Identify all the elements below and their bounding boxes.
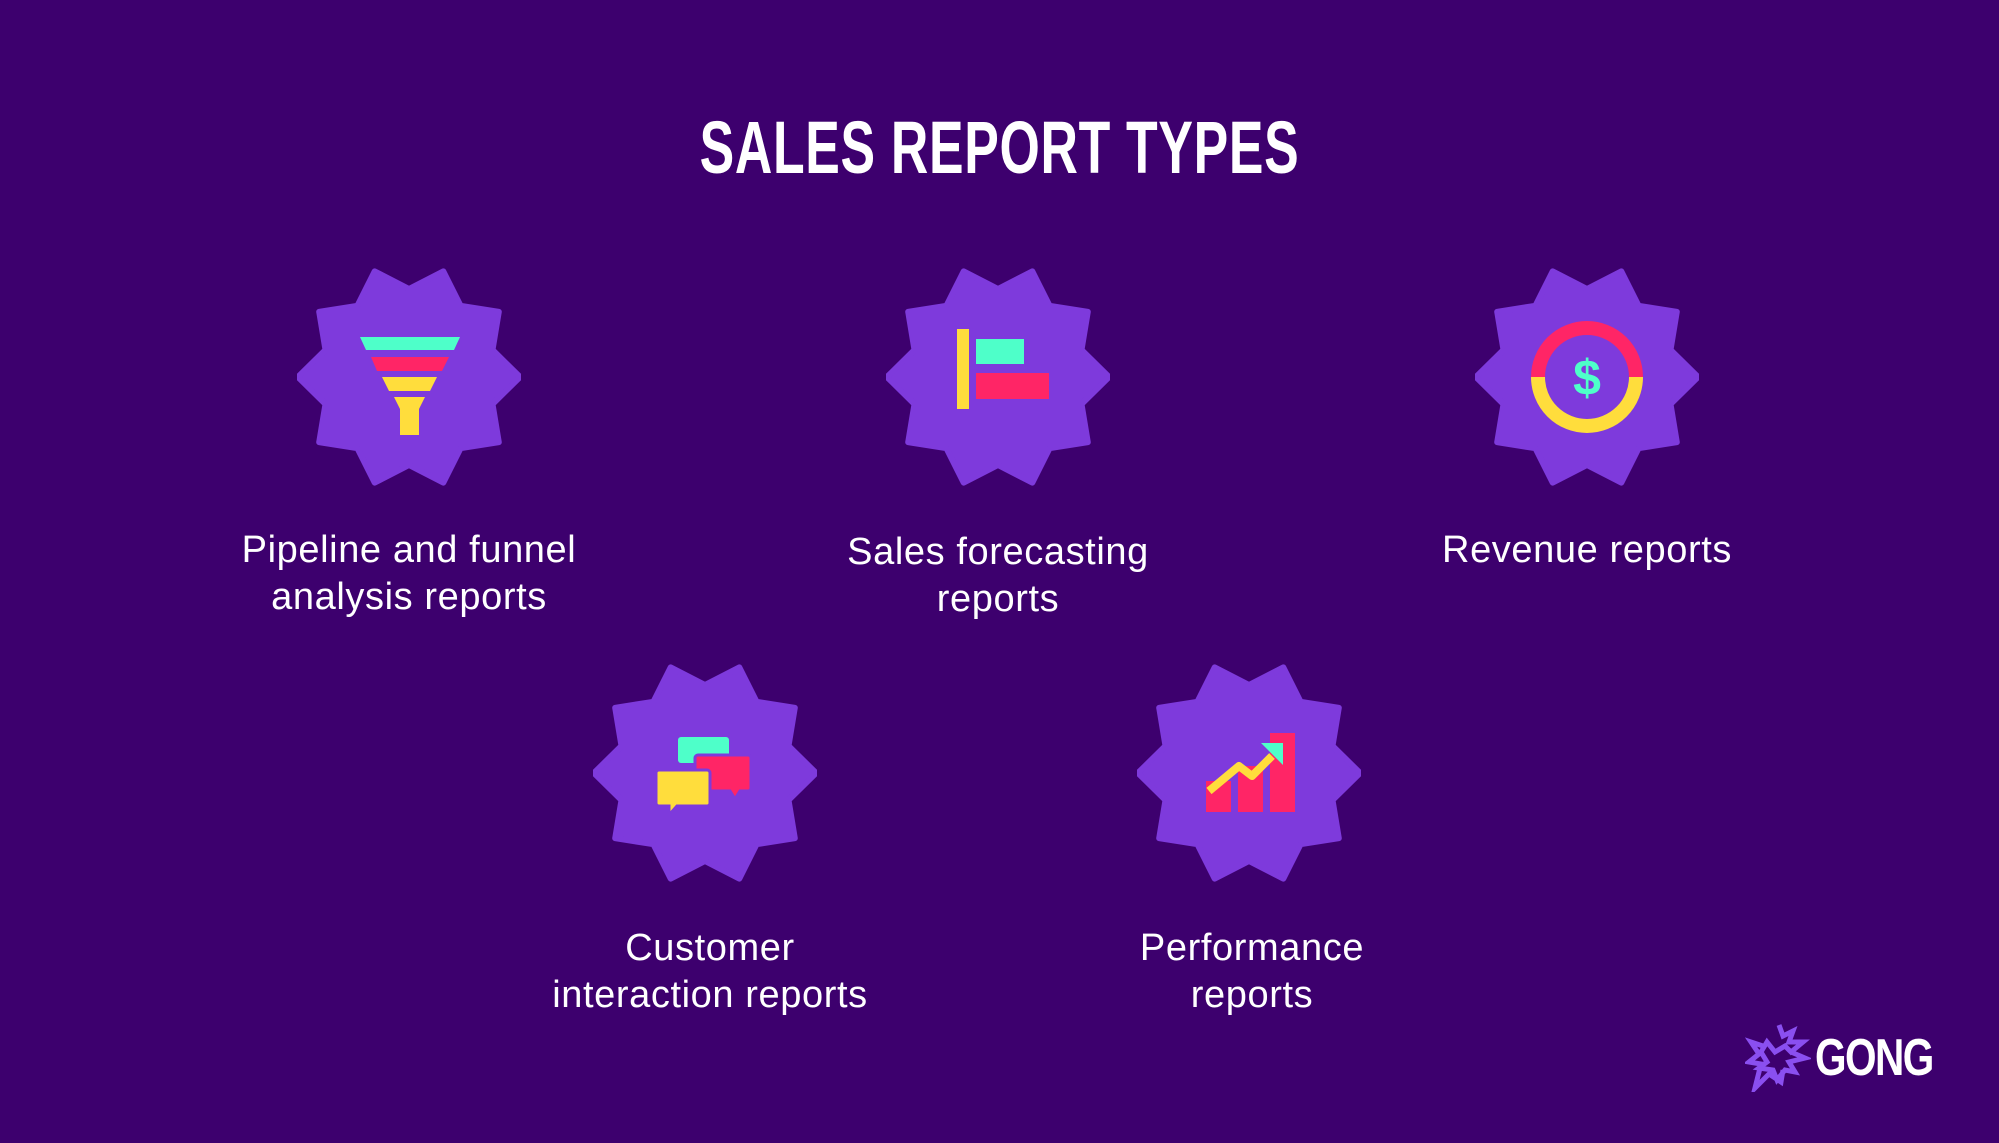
- badge: performance: [1137, 664, 1361, 882]
- label: forecasting: Sales forecasting: [847, 531, 1149, 573]
- label: performance: reports: [1191, 974, 1313, 1016]
- logo text: GONG: [1815, 1029, 1933, 1087]
- label: performance: Performance: [1140, 927, 1364, 969]
- label: revenue: Revenue reports: [1442, 529, 1732, 571]
- label: pipeline: [242, 529, 576, 618]
- label: pipeline: Pipeline and funnel: [242, 529, 576, 571]
- icon: dollar ring: $: [1573, 350, 1601, 406]
- icon: growth chart: [1206, 733, 1295, 812]
- badge: revenue: [1475, 268, 1699, 486]
- logo: gong: [1745, 1024, 1933, 1092]
- label: customer interaction: Customer: [625, 927, 795, 969]
- label: pipeline: analysis reports: [271, 576, 547, 618]
- title: SALES REPORT TYPES: [700, 106, 1299, 189]
- label: forecasting: [847, 531, 1149, 620]
- icon: dollar ring: [1538, 328, 1636, 426]
- label: forecasting: reports: [937, 578, 1059, 620]
- badge: funnel: [297, 268, 521, 486]
- badge: customer interaction: [593, 664, 817, 882]
- icon: bar chart: [957, 329, 1049, 409]
- label: customer interaction: [552, 927, 868, 1016]
- label: customer interaction: interaction reports: [552, 974, 868, 1016]
- icon: chat bubbles: [656, 737, 751, 815]
- icon: funnel: [360, 337, 460, 435]
- badge: forecasting: [886, 268, 1110, 486]
- label: performance: [1140, 927, 1364, 1016]
- icon: gong star: [1745, 1024, 1811, 1092]
